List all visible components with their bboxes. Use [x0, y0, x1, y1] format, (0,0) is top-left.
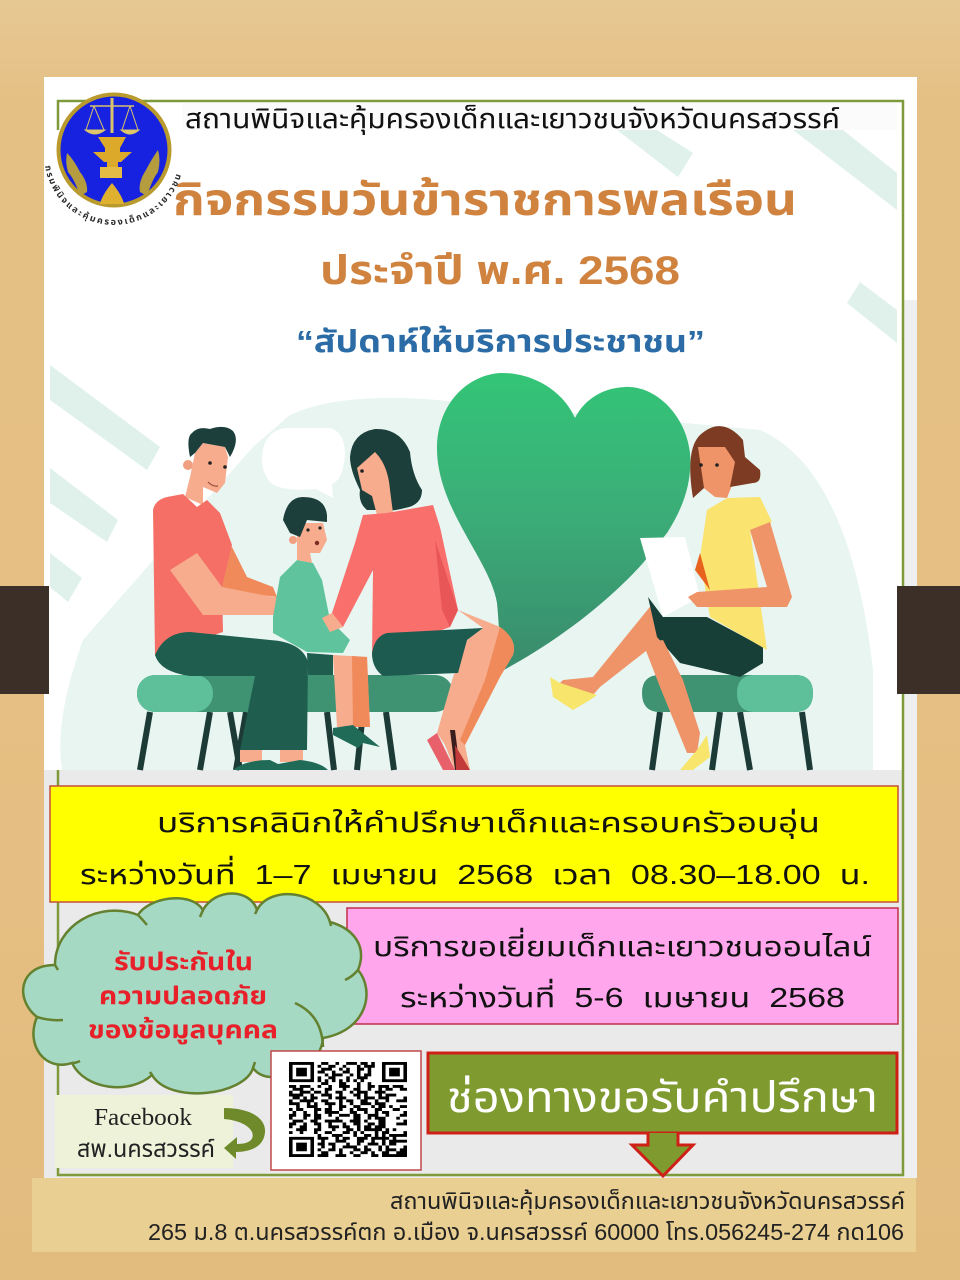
counsellor figure [550, 426, 813, 770]
header organization name: สถานพินิจและคุ้มครองเด็กและเยาวชนจังหวัดนครสวรรค์ [185, 103, 840, 135]
white poster panel [44, 77, 917, 770]
Facebook label: Facebook [94, 1105, 192, 1131]
naga right [140, 150, 160, 196]
diagonal stripes [50, 130, 897, 602]
naga left [66, 153, 87, 196]
cloud callout: รับประกันใน [114, 948, 253, 976]
right edge grey strip [904, 300, 917, 1178]
QR code [271, 1051, 421, 1170]
left bench [137, 675, 453, 770]
man figure [153, 427, 328, 770]
pale background blobs [60, 398, 873, 770]
pink online visit box [347, 908, 898, 1024]
yellow clinic box [50, 786, 898, 902]
consultation channel banner [428, 1053, 897, 1133]
cloud callout [23, 894, 366, 1093]
scales [85, 98, 139, 134]
green heart [437, 373, 690, 672]
yellow clinic box: ระหว่างวันที่ 1–7 เมษายน 2568 เวลา 08.30–18.00 น. [80, 855, 870, 890]
olive frame [58, 101, 903, 1175]
lower grey panel [44, 770, 917, 1178]
subtitle quote: “สัปดาห์ให้บริการประชาชน” [296, 324, 705, 359]
curved arrow to QR [224, 1108, 265, 1159]
dark strap right [897, 586, 960, 694]
pedestal [93, 137, 132, 178]
header white strip [182, 103, 897, 130]
logo emblem [45, 92, 181, 225]
mother figure [322, 429, 514, 770]
speech bubble [262, 428, 345, 498]
cloud callout: ความปลอดภัย [99, 982, 267, 1010]
footer address band: 265 ม.8 ต.นครสวรรค์ตก อ.เมือง จ.นครสวรรค์ 60000 โทร.056245-274 กด106 [148, 1219, 904, 1245]
consultation channel banner: ช่องทางขอรับคำปรึกษา [447, 1074, 878, 1122]
title line 2: ประจำปี พ.ศ. 2568 [320, 249, 680, 293]
down arrow [632, 1133, 693, 1176]
dark strap left [0, 586, 49, 694]
title line 1: กิจกรรมวันข้าราชการพลเรือน [173, 176, 797, 225]
Facebook label [55, 1095, 233, 1168]
flame [100, 183, 124, 204]
Facebook label: สพ.นครสวรรค์ [77, 1136, 215, 1163]
white image background [50, 130, 897, 770]
footer address band: สถานพินิจและคุ้มครองเด็กและเยาวชนจังหวัดนครสวรรค์ [390, 1188, 905, 1215]
cloud callout: ของข้อมูลบุคคล [88, 1016, 278, 1045]
yellow clinic box: บริการคลินิกให้คำปรึกษาเด็กและครอบครัวอบอุ่น [157, 807, 820, 839]
footer address band [32, 1178, 916, 1252]
pink online visit box: ระหว่างวันที่ 5-6 เมษายน 2568 [400, 978, 845, 1013]
illustration panel [50, 130, 897, 770]
pink online visit box: บริการขอเยี่ยมเด็กและเยาวชนออนไลน์ [373, 927, 872, 962]
ring label: กรมพินิจและคุ้มครองเด็กและเยาวชน [45, 166, 181, 225]
child figure [273, 497, 380, 748]
